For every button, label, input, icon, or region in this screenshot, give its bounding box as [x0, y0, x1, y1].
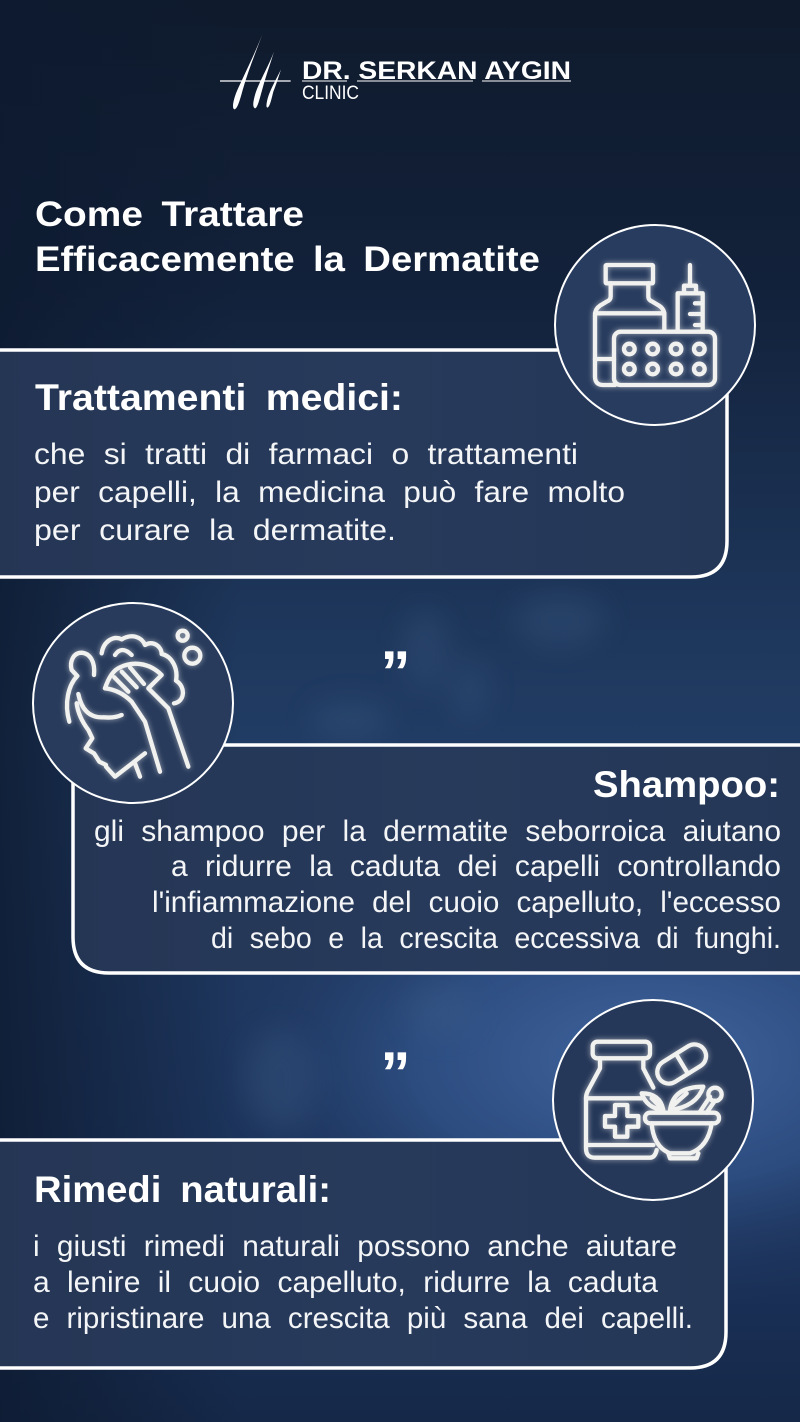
card body text: per curare la dermatite.: [34, 514, 396, 547]
quote mark: ”: [380, 1040, 410, 1107]
logo subtitle: CLINIC: [302, 83, 359, 104]
card body text: che si tratti di farmaci o trattamenti: [34, 438, 578, 471]
icon: herbal remedy bottle, capsule and mortar: [553, 1000, 753, 1200]
card body text: l'infiammazione del cuoio capelluto, l'eccesso: [152, 886, 781, 919]
card body text: [34, 438, 625, 547]
card heading: Shampoo:: [593, 764, 780, 805]
card body text: i giusti rimedi naturali possono anche aiutare: [33, 1230, 677, 1263]
card body text: per capelli, la medicina può fare molto: [34, 476, 625, 509]
quote mark: ”: [380, 639, 410, 706]
panel: Rimedi naturali: [0, 1000, 753, 1368]
card heading: Trattamenti medici:: [35, 377, 403, 418]
panel: Shampoo: [33, 603, 800, 973]
card body text: e ripristinare una crescita più sana dei capelli.: [33, 1302, 693, 1335]
card body text: a lenire il cuoio capelluto, ridurre la caduta: [33, 1266, 658, 1299]
icon: hair washing with foam: [33, 603, 233, 803]
logo mark: hair strands: [220, 32, 291, 109]
logo wordmark: DR. SERKAN AYGIN: [302, 57, 571, 85]
card body text: a ridurre la caduta dei capelli controllando: [171, 850, 781, 883]
card body text: [94, 815, 781, 955]
title: Come Trattare: [35, 195, 304, 234]
card body text: [33, 1230, 693, 1335]
icon: medicine bottle, syringe and blister pack: [555, 225, 755, 425]
panel: Trattamenti medici: [0, 225, 755, 577]
card shape: [73, 745, 800, 973]
title: Efficacemente la Dermatite: [35, 240, 540, 279]
logo underline: [302, 80, 571, 82]
card shape: [0, 350, 727, 577]
logo: [220, 32, 571, 109]
card shape: [0, 1140, 726, 1368]
card heading: Rimedi naturali:: [34, 1169, 331, 1210]
title: [35, 195, 540, 279]
card body text: gli shampoo per la dermatite seborroica aiutano: [94, 815, 781, 848]
card body text: di sebo e la crescita eccessiva di funghi.: [211, 922, 781, 955]
